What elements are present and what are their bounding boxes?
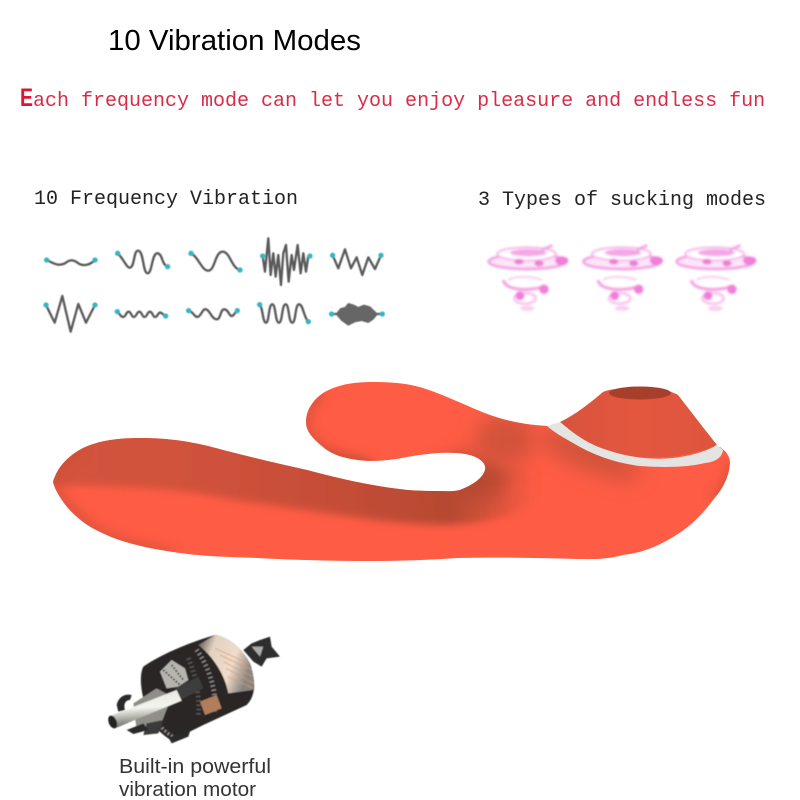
icon: wave 8 [186,308,240,319]
icon: suction swirl 3 [677,245,756,311]
winding stripes [215,648,254,688]
icon: wave 6 [43,296,98,332]
title: 10 Vibration Modes [108,25,361,57]
product: coral device [53,382,730,561]
chart: vibration waveform icons [43,238,385,332]
shaft collar [175,677,203,700]
motor caption: Built-in powerful [119,756,271,778]
motor housing [141,635,254,741]
gear detail [160,660,188,688]
suction opening [609,386,671,400]
left clamp [117,695,132,712]
icon: wave 2 [115,251,170,273]
icon: wave 9 [257,302,311,324]
left mechanism [133,688,172,730]
lower clamp [127,723,190,743]
orange part [200,695,222,715]
icon: wave 5 [330,249,384,275]
red subtitle: ach frequency mode can let you enjoy pleasure and endless fun [33,90,765,113]
white ring band [547,422,723,467]
icon: vibration motor [106,635,280,743]
heading: sucking modes: 3 Types of sucking modes [478,189,766,212]
red subtitle: E [20,84,33,112]
drive shaft [110,690,182,728]
icon: wave 7 [115,309,168,319]
motor caption [119,756,271,800]
icon: suction swirl 1 [489,245,568,311]
icon: wave 10 [329,303,385,325]
speckled housing texture [197,650,215,712]
suction cone [560,388,717,458]
winding section [198,635,254,693]
icon: wave 1 [44,257,98,265]
right end bracket [243,637,280,667]
icon: wave 4 [260,238,313,285]
icon: suction swirl 2 [583,245,663,311]
icon: wave 3 [188,251,243,273]
heading: 10 frequency vibration: 10 Frequency Vibration [34,188,298,211]
device body [53,382,730,561]
shaft end cap [106,714,119,730]
